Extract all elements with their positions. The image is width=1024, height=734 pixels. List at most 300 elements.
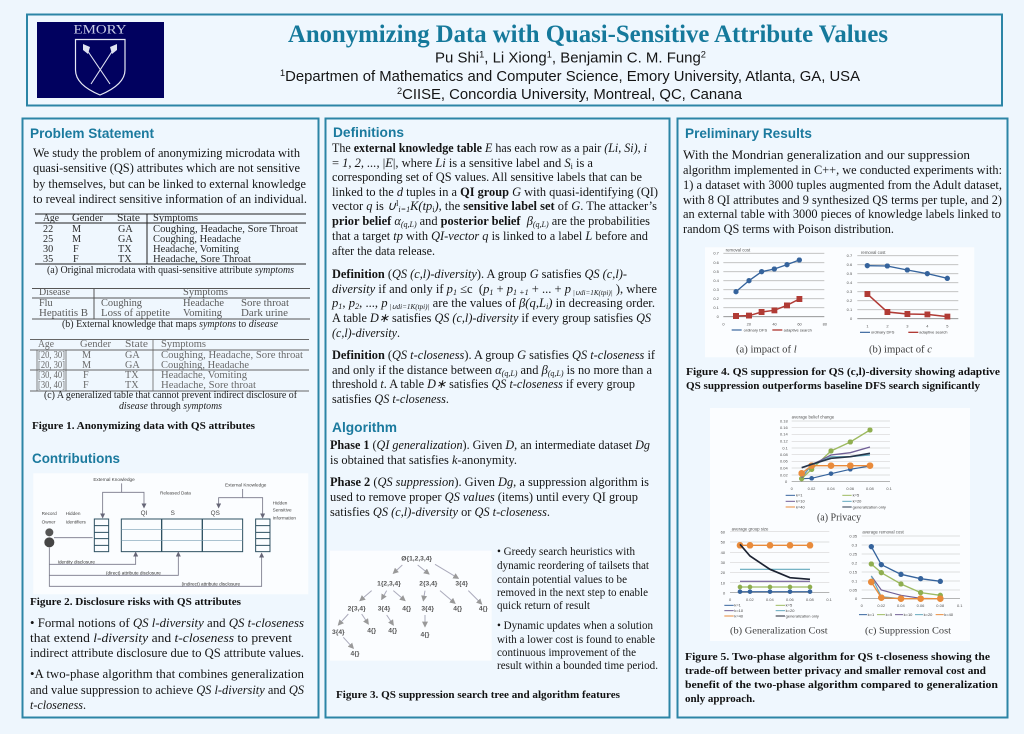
- table a: original microdata: 35: [43, 254, 53, 265]
- table c: generalized table: Gender: [80, 339, 112, 350]
- chart: generalization cost: 0.1: [826, 597, 833, 602]
- text: definition QS (c,l)-diversity: + ... +: [529, 282, 565, 296]
- chart: suppression cost: 0.08: [936, 603, 945, 608]
- chart: impact of c: 0.6: [847, 262, 853, 267]
- chart: privacy: 0.06: [780, 459, 789, 464]
- text: experiments description: an external table with 3000 pieces of knowledge labels linked to: [683, 207, 1001, 221]
- table c: generalized table: [20, 30]: [38, 350, 65, 361]
- text: definition QS (c,l)-diversity: ), where: [613, 282, 657, 296]
- bullet: formal notions: • Formal notions of QS l-diversity and QS t-closeness: [30, 616, 304, 630]
- figure 3: search tree: 4{}: [421, 632, 430, 639]
- heading: algorithm: Algorithm: [332, 419, 397, 435]
- table a: original microdata: Age: [43, 213, 59, 224]
- chart: suppression cost: 0.25: [849, 551, 858, 556]
- text: phase 1: Phase 1 (QI generalization). Given D, an intermediate dataset Dg: [330, 438, 650, 452]
- table c: generalized table: F: [83, 370, 89, 381]
- figure 3: search tree: 3{4}: [421, 606, 434, 613]
- chart: impact of c: 0: [850, 316, 853, 321]
- text: experiments description: algorithm implemented in C++, we conducted experiments with:: [683, 163, 1002, 177]
- table c: generalized table: M: [82, 360, 91, 371]
- figure 3: search tree: 4{}: [367, 628, 377, 635]
- chart: suppression cost: 0.1: [957, 603, 963, 608]
- figure 1: tables: [30, 213, 310, 432]
- chart: suppression cost: k=40: [944, 612, 954, 617]
- chart: privacy: 0: [791, 486, 794, 491]
- text: definition QS (c,l)-diversity: (c,l)-diversity.: [332, 326, 400, 340]
- text: definition QS (c,l)-diversity: are the values of: [430, 296, 519, 310]
- text: definition QS (c,l)-diversity: |∪di=1K(tpi)|: [571, 289, 613, 297]
- chart: suppression cost: (c) Suppression Cost: [865, 626, 951, 637]
- table a: original microdata: Coughing, Headache: [153, 234, 241, 245]
- table c: generalized table: Coughing, Headache, Sore throat: [161, 350, 303, 361]
- chart: suppression cost: average removal cost: [862, 530, 904, 535]
- table a: original microdata: State: [117, 213, 141, 224]
- figure 2: disclosure risks diagram: Owner: [42, 519, 56, 524]
- chart: impact of l: 40: [772, 322, 778, 327]
- chart: privacy: 0.04: [780, 465, 789, 470]
- caption a: (a) Original microdata with quasi-sensitive attribute symptoms: [47, 265, 294, 276]
- text: external knowledge table: that a target tp with QI-vector q is linked to a label L before and: [332, 229, 649, 243]
- figure 2: disclosure risks diagram: Hidden: [273, 500, 288, 505]
- chart: impact of l: 0.7: [713, 251, 720, 256]
- text: definition QS t-closeness: and: [517, 363, 542, 377]
- figure 2: disclosure risks diagram: Record: [42, 511, 57, 516]
- chart: impact of c: 5: [946, 324, 949, 329]
- figure 3: search tree: 4{}: [388, 628, 398, 635]
- text: phase 2: Phase 2 (QS suppression). Given Dg, a suppression algorithm is: [330, 475, 649, 489]
- text: problem statement: [33, 146, 307, 206]
- affiliation 1: 1: [280, 68, 285, 78]
- text: definition QS t-closeness: and only if the distance between α: [332, 363, 502, 377]
- chart: suppression cost: 0.15: [849, 569, 858, 574]
- table c: generalized table: Coughing, Headache: [161, 360, 249, 371]
- chart: impact of c: 0.4: [847, 280, 853, 285]
- figure 3: search tree: 4{}: [351, 651, 360, 658]
- chart: impact of l: 0.5: [713, 269, 720, 274]
- text: definition QS t-closeness: Definition (QS t-closeness). A group G satisfies QS t-closeness if: [332, 348, 656, 362]
- chart: privacy: k=1: [796, 493, 803, 498]
- table c: generalized table: [30, 40]: [38, 370, 65, 381]
- chart: privacy: 0.08: [866, 486, 875, 491]
- figure 4 caption: QS suppression outperforms baseline DFS search significantly: [686, 381, 981, 392]
- text: experiments description: random QS terms with Poison distribution.: [683, 222, 894, 236]
- text: problem statement: by themselves, but can be linked to external knowledge: [33, 177, 306, 191]
- logo: Emory University shield: [37, 22, 164, 98]
- bullet: dynamic updates: continuous improvement of the: [497, 645, 636, 659]
- header banner: [27, 14, 1002, 106]
- text: external knowledge table: are the probabilities: [549, 214, 650, 228]
- figure 2: disclosure risks diagram: (indirect) attribute disclosure: [182, 581, 241, 586]
- chart: generalization cost: (b) Generalization Cost: [730, 626, 828, 637]
- text: definition QS t-closeness: is no more than a: [564, 363, 652, 377]
- heading: contributions: Contributions: [32, 450, 120, 466]
- chart: impact of l: 60: [797, 322, 803, 327]
- chart: impact of l: 0.1: [713, 305, 720, 310]
- chart: impact of l: 0.2: [713, 296, 720, 301]
- table b: external knowledge: Loss of appetite: [101, 308, 170, 319]
- chart: generalization cost: k=5: [786, 603, 793, 608]
- bullet: two-phase algorithm: t-closeness.: [30, 698, 86, 712]
- chart: impact of c: (b) impact of c: [869, 345, 932, 356]
- text: external knowledge table: prior belief α: [332, 214, 401, 228]
- chart: suppression cost: 0: [861, 603, 864, 608]
- text: external knowledge table: (q,L): [401, 220, 417, 229]
- text: external knowledge table: [332, 141, 658, 258]
- table a: original microdata: F: [73, 244, 79, 255]
- figure 5 caption: [685, 652, 998, 705]
- affiliation 2: CIISE, Concordia University, Montreal, QC, Canana: [402, 87, 743, 103]
- chart: suppression cost: 0.2: [852, 560, 858, 565]
- text: definition QS t-closeness: satisfies QS t-closeness.: [332, 392, 449, 406]
- text: definition QS (c,l)-diversity: 1 +1: [513, 288, 529, 297]
- figure 4 caption: Figure 4. QS suppression for QS (c,l)-diversity showing adaptive: [686, 367, 1000, 378]
- chart: generalization cost: 30: [721, 560, 726, 565]
- figure 4 caption: [686, 367, 1000, 392]
- chart: generalization cost: 40: [721, 550, 726, 555]
- caption c: (c) A generalized table that cannot prevent indirect disclosure of: [44, 390, 298, 401]
- chart: privacy: 0.04: [827, 486, 836, 491]
- chart: suppression cost: [849, 530, 963, 637]
- figure 1 caption: Figure 1. Anonymizing data with QS attributes: [32, 421, 255, 432]
- text: definition QS t-closeness: (q,L): [502, 369, 518, 378]
- table c: generalized table: Headache, Vomiting: [161, 370, 247, 381]
- figure 2: disclosure risks diagram: S: [171, 510, 175, 517]
- figure 3: search tree: Ø{1,2,3,4}: [401, 556, 432, 563]
- chart: suppression cost: k=1: [868, 612, 875, 617]
- table a: original microdata: TX: [118, 254, 132, 265]
- affiliation 2: 2: [397, 86, 402, 96]
- table c: generalized table: Symptoms: [161, 339, 206, 350]
- chart: impact of c: [847, 250, 958, 356]
- figure 3: search tree: 4{}: [453, 606, 463, 613]
- figure 5 caption: trade-off between better privacy and smaller removal cost and: [685, 666, 986, 677]
- figure 3 caption: Figure 3. QS suppression search tree and algorithm features: [336, 690, 620, 701]
- figure 2: disclosure risks diagram: External Knowledge: [225, 482, 267, 487]
- chart: generalization cost: k=40: [734, 613, 744, 618]
- chart: impact of c: 0.2: [847, 298, 853, 303]
- bullet: two-phase algorithm: [30, 667, 304, 712]
- text: definition QS (c,l)-diversity: p: [564, 282, 571, 296]
- panel: problem statement and contributions: [22, 118, 318, 718]
- text: external knowledge table: posterior belief β: [441, 214, 533, 228]
- table b: external knowledge: Hepatitis B: [39, 308, 88, 319]
- chart: privacy: 0.18: [780, 418, 789, 423]
- table b: external knowledge: Disease: [39, 287, 70, 298]
- text: definition QS (c,l)-diversity: ,: [342, 296, 349, 310]
- text: external knowledge table: and: [417, 214, 441, 228]
- text: definition QS (c,l)-diversity: 1: [453, 288, 457, 297]
- bullet: formal notions: that extend l-diversity and t-closeness to prevent: [30, 631, 293, 645]
- table a: original microdata: [35, 213, 306, 265]
- chart: impact of l: 0: [722, 322, 725, 327]
- text: definition QS (c,l)-diversity: Definition (QS (c,l)-diversity). A group G satisfies QS (c,l)-: [332, 267, 627, 281]
- figure 2: disclosure risks diagram: Hidden: [66, 511, 81, 516]
- chart: impact of l: 0.6: [713, 260, 720, 265]
- table c: generalized table: Age: [38, 339, 54, 350]
- table b: external knowledge: Dark urine: [241, 308, 288, 319]
- text: experiments description: [683, 148, 1002, 236]
- text: definition QS (c,l)-diversity: ≤c (: [457, 282, 483, 296]
- chart: privacy: generalization only: [853, 504, 886, 509]
- text: external knowledge table: K(tp: [409, 199, 432, 213]
- chart: privacy: 0.02: [780, 472, 789, 477]
- table c: generalized table: State: [125, 339, 149, 350]
- chart: impact of l: adaptive search: [784, 327, 812, 332]
- chart: privacy: 0.12: [780, 439, 789, 444]
- chart: suppression cost: 0.35: [849, 533, 858, 538]
- chart: impact of c: 0.1: [847, 307, 853, 312]
- text: definition QS t-closeness: threshold t. A table D∗ satisfies QS t-closeness if every group: [332, 377, 635, 391]
- bullet: formal notions: [30, 616, 304, 660]
- figure 2: disclosure risks diagram: QI: [141, 510, 148, 517]
- figure 3: search tree: 3{4}: [332, 629, 345, 636]
- chart: impact of c: 0.3: [847, 289, 853, 294]
- affiliation 1: Departmen of Mathematics and Computer Science, Emory University, Atlanta, GA, USA: [285, 69, 860, 85]
- table a: original microdata: GA: [118, 234, 133, 245]
- text: definition QS (c,l)-diversity: p: [380, 296, 388, 310]
- chart: impact of c: 0.5: [847, 271, 853, 276]
- text: external knowledge table: (q,L): [533, 220, 549, 229]
- panel: preliminary results: [678, 118, 1008, 718]
- figure 3: search tree: 3{4}: [455, 581, 468, 588]
- chart: privacy: 0: [785, 479, 788, 484]
- chart: impact of c: 1: [866, 324, 869, 329]
- chart: impact of c: 2: [886, 324, 889, 329]
- table c: generalized table: GA: [125, 350, 140, 361]
- text: external knowledge table: after the data release.: [332, 244, 435, 258]
- table c: generalized table: M: [82, 350, 91, 361]
- figure 5 caption: only approach.: [685, 694, 755, 705]
- table c: generalized table: [30, 40]: [38, 380, 65, 391]
- chart: generalization cost: average group size: [732, 526, 769, 531]
- figure 5 caption: benefit of the two-phase algorithm compared to generalization: [685, 680, 998, 691]
- text: definition QS (c,l)-diversity: in decreasing order.: [556, 296, 653, 310]
- chart: suppression cost: k=5: [886, 612, 893, 617]
- bullet: greedy search: [497, 544, 650, 612]
- bullet: greedy search: dynamic reordering of tailsets that: [497, 558, 650, 572]
- text: definition QS (c,l)-diversity: 2: [355, 302, 359, 311]
- chart: impact of c: 4: [926, 324, 929, 329]
- text: external knowledge table: i: [432, 205, 435, 214]
- chart: suppression cost: 0.3: [852, 542, 858, 547]
- chart: generalization cost: k=1: [734, 603, 742, 608]
- text: external knowledge table: i: [571, 162, 574, 171]
- chart: impact of l: 80: [823, 322, 828, 327]
- chart: impact of l: 20: [747, 322, 752, 327]
- text: experiments description: With the Mondrian generalization and our suppression: [683, 148, 970, 162]
- figure 2: disclosure risks diagram: Identity disclosure: [58, 560, 95, 565]
- table c: generalized table: [30, 339, 309, 391]
- text: external knowledge table: corresponding set of QS values. All sensitive labels that can be: [332, 170, 642, 184]
- figure 3: search tree: [330, 551, 492, 661]
- chart: privacy: 0.1: [782, 445, 789, 450]
- text: definition QS (c,l)-diversity: 1: [338, 302, 342, 311]
- table a: original microdata: Headache, Vomiting: [153, 244, 239, 255]
- table b: external knowledge: Headache: [183, 298, 224, 309]
- figure 2 caption: Figure 2. Disclosure risks with QS attributes: [30, 597, 241, 608]
- table a: original microdata: Headache, Sore Throat: [153, 254, 251, 265]
- bullet: greedy search: removed in the next step to enable: [497, 585, 648, 599]
- table a: original microdata: TX: [118, 244, 132, 255]
- bullet: two-phase algorithm: and value suppression to achieve QS l-diversity and QS: [30, 683, 304, 697]
- heading: definitions: Definitions: [333, 124, 404, 140]
- figure 2: disclosure risks diagram: Information: [273, 515, 296, 520]
- chart: generalization cost: k=10: [734, 608, 744, 613]
- bullet: dynamic updates: with a lower cost is found to enable: [497, 632, 655, 646]
- figure 2: disclosure risks diagram: QS: [211, 510, 220, 517]
- table c: generalized table: GA: [125, 360, 140, 371]
- text: definition QS (c,l)-diversity: p: [331, 296, 338, 310]
- table a: original microdata: M: [72, 224, 81, 235]
- heading: problem statement: Problem Statement: [30, 125, 154, 141]
- chart: privacy: 0.08: [780, 452, 789, 457]
- text: definition QS (c,l)-diversity: p: [506, 282, 513, 296]
- bullet: greedy search: quick return of result: [497, 598, 591, 612]
- chart: generalization cost: generalization only: [786, 613, 819, 618]
- chart: impact of l: 0.3: [713, 287, 720, 292]
- chart: suppression cost: k=20: [924, 612, 933, 617]
- chart: generalization cost: 10: [721, 580, 726, 585]
- text: definition QS (c,l)-diversity: i: [546, 302, 548, 311]
- figure 2: disclosure risks diagram: Sensitive: [273, 508, 292, 513]
- table c: generalized table: [20, 30]: [38, 360, 65, 371]
- table a: original microdata: Symptoms: [153, 213, 198, 224]
- authors: 1: [547, 50, 552, 60]
- figure 3: search tree: 2{3,4}: [419, 581, 438, 588]
- table a: original microdata: Gender: [72, 213, 104, 224]
- chart: impact of l: ordinary DFS: [744, 327, 767, 332]
- chart: impact of c: 0.7: [847, 253, 853, 258]
- text: definition QS t-closeness: [332, 348, 656, 406]
- figure 2: disclosure risks diagram: Identifiers: [66, 519, 87, 524]
- authors: , Li Xiong: [484, 50, 547, 66]
- table c: generalized table: Headache, Sore throat: [161, 380, 256, 391]
- text: definition QS (c,l)-diversity: [331, 267, 657, 340]
- table b: external knowledge: Vomiting: [183, 308, 222, 319]
- chart: privacy: 0.06: [846, 486, 855, 491]
- table a: original microdata: Coughing, Headache, Sore Throat: [153, 224, 298, 235]
- chart: suppression cost: 0.06: [917, 603, 925, 608]
- figure 5 caption: Figure 5. Two-phase algorithm for QS t-closeness showing the: [685, 652, 990, 663]
- figure 3: search tree: 2{3,4}: [348, 606, 366, 613]
- chart: privacy: k=20: [853, 499, 862, 504]
- table c: generalized table: F: [83, 380, 89, 391]
- text: problem statement: to reveal indirect sensitive information of an individual.: [33, 192, 307, 206]
- bullet: dynamic updates: [497, 618, 658, 672]
- table a: original microdata: 30: [43, 244, 53, 255]
- text: phase 2: used to remove proper QS values (items) until every QI group: [330, 490, 638, 504]
- chart: privacy: (a) Privacy: [817, 513, 861, 524]
- caption b: (b) External knowledge that maps symptons to disease: [62, 319, 278, 330]
- chart: impact of l: removal cost: [726, 248, 751, 253]
- chart: suppression cost: k=10: [904, 612, 913, 617]
- table a: original microdata: 22: [43, 224, 53, 235]
- title: Anonymizing Data with Quasi-Sensitive Attribute Values: [288, 19, 888, 48]
- chart: impact of c: removal cost: [861, 250, 886, 255]
- text: external knowledge table: vector q is ∪: [332, 199, 396, 213]
- logo: Emory University shield: EMORY: [74, 22, 127, 36]
- text: phase 2: satisfies QS (c,l)-diversity or QS t-closeness.: [330, 505, 550, 519]
- text: definition QS (c,l)-diversity: |∪di=1K(tpi)|: [388, 303, 430, 311]
- figure 3: search tree: 3{4}: [378, 606, 391, 613]
- text: problem statement: We study the problem of anonymizing microdata with: [33, 146, 301, 160]
- chart: impact of l: 0.4: [713, 278, 720, 283]
- text: experiments description: with 8 QI attributes and 9 synthesized QS terms per tuple, and 2): [683, 193, 1002, 207]
- text: external knowledge table: The external knowledge table E has each row as a pair (Li, Si), i: [332, 141, 648, 155]
- chart: impact of l: [713, 248, 828, 356]
- chart: suppression cost: 0.05: [849, 587, 858, 592]
- chart: generalization cost: [721, 526, 833, 637]
- text: external knowledge table: , the sensitive label set of G. The attacker’s: [439, 199, 657, 213]
- heading: preliminary results: Preliminary Results: [685, 125, 812, 141]
- text: definition QS (c,l)-diversity: p: [348, 296, 355, 310]
- chart: impact of c: ordinary DFS: [871, 330, 895, 335]
- text: definition QS (c,l)-diversity: , ...,: [359, 296, 381, 310]
- text: phase 2: [330, 475, 649, 519]
- figure 5: privacy and cost charts: [710, 408, 970, 641]
- caption c: [44, 390, 298, 412]
- table c: generalized table: TX: [125, 370, 139, 381]
- chart: privacy: average belief change: [792, 415, 835, 420]
- bullet: two-phase algorithm: •A two-phase algorithm that combines generalization: [30, 667, 304, 681]
- table a: original microdata: GA: [118, 224, 133, 235]
- figure 4: removal cost line charts: [705, 247, 974, 357]
- text: definition QS (c,l)-diversity: ): [547, 296, 553, 310]
- chart: privacy: [780, 415, 893, 524]
- figure 2: disclosure risks diagram: [33, 473, 308, 594]
- text: definition QS (c,l)-diversity: diversity if and only if p: [332, 282, 453, 296]
- table b: external knowledge: Flu: [39, 298, 53, 309]
- figure 2: disclosure risks diagram: External Knowledge: [93, 477, 135, 482]
- table c: generalized table: TX: [125, 380, 139, 391]
- chart: generalization cost: 60: [721, 529, 726, 534]
- text: external knowledge table: l: [396, 199, 399, 208]
- chart: generalization cost: 50: [721, 540, 726, 545]
- chart: privacy: 0.02: [808, 486, 816, 491]
- chart: suppression cost: 0.02: [877, 603, 886, 608]
- figure 3: search tree: 4{}: [479, 606, 488, 613]
- table b: external knowledge: Sore throat: [241, 298, 289, 309]
- figure 3: search tree: 4{}: [402, 606, 412, 613]
- text: definition QS (c,l)-diversity: A table D∗ satisfies QS (c,l)-diversity if every group satisfies QS: [332, 311, 651, 325]
- bullet: dynamic updates: result within a bounded time period.: [497, 658, 658, 672]
- chart: impact of l: (a) impact of l: [736, 345, 797, 356]
- chart: suppression cost: 0.04: [897, 603, 906, 608]
- text: external knowledge table: linked to the d tuples in a QI group G with quasi-identifying (QI): [332, 185, 658, 199]
- chart: privacy: 0.1: [886, 486, 893, 491]
- bullet: greedy search: • Greedy search heuristics with: [497, 544, 635, 558]
- bullet: formal notions: indirect attribute disclosure due to QS attribute values.: [30, 646, 304, 660]
- chart: privacy: 0.14: [780, 432, 789, 437]
- chart: privacy: k=40: [796, 504, 806, 509]
- text: definition QS (c,l)-diversity: 1: [489, 288, 493, 297]
- figure 3: search tree: 1{2,3,4}: [377, 581, 401, 588]
- bullet: greedy search: contain potential values to be: [497, 572, 627, 586]
- chart: impact of c: 3: [906, 324, 909, 329]
- bullet: dynamic updates: • Dynamic updates when a solution: [497, 618, 653, 632]
- chart: suppression cost: 0: [855, 596, 858, 601]
- panel: definitions and algorithm: [326, 118, 670, 718]
- text: definition QS t-closeness: (q,L): [548, 369, 564, 378]
- table b: external knowledge: Coughing: [101, 298, 142, 309]
- authors: 2: [701, 50, 706, 60]
- caption c: disease through symptoms: [119, 401, 222, 412]
- chart: generalization cost: 0.08: [806, 597, 815, 602]
- chart: generalization cost: k=20: [786, 608, 795, 613]
- table b: external knowledge: [32, 287, 310, 319]
- chart: generalization cost: 0: [729, 597, 732, 602]
- authors: Pu Shi: [435, 50, 478, 66]
